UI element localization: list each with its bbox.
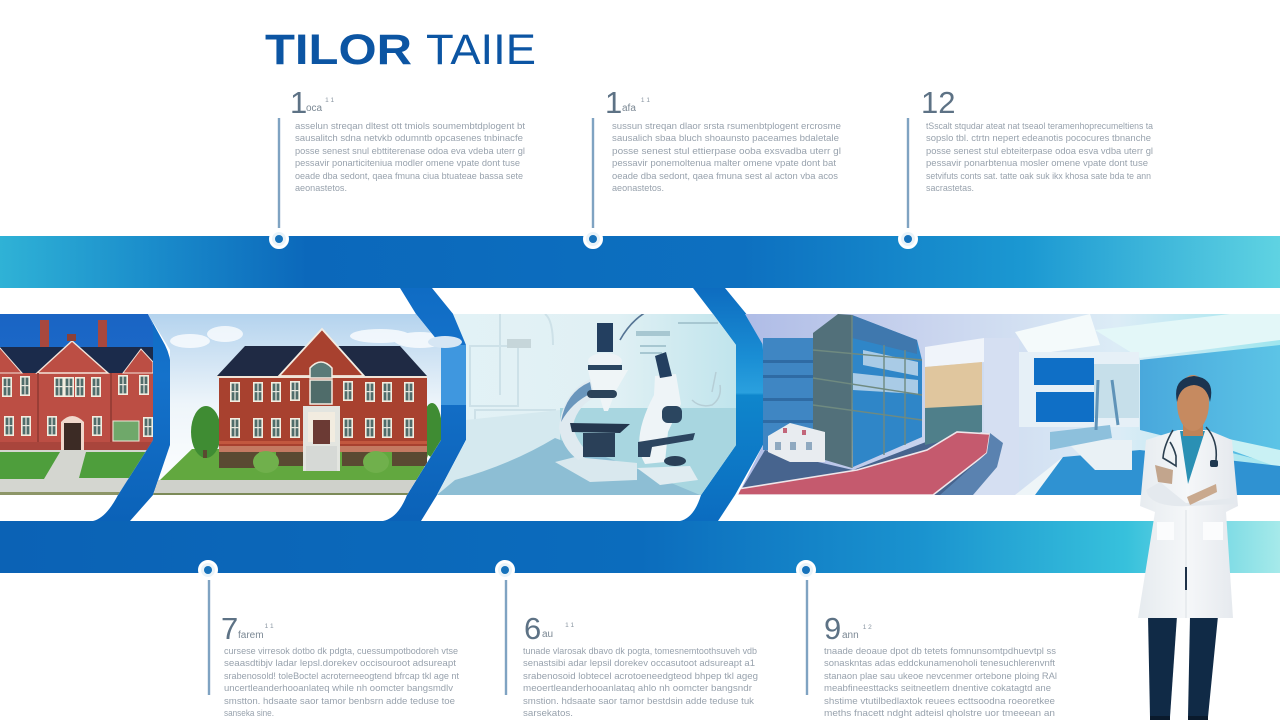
beige interior [925,338,984,445]
sublabel: 1 1 [641,97,650,104]
number: 12 [921,85,955,120]
arc cable [619,314,644,340]
stage [638,433,695,457]
lower wall [960,338,1019,495]
body text: sussun streqan dlaor srsta rsumenbtplogent ercrosme [612,121,841,132]
focus knob [662,406,682,423]
lab window [507,339,531,348]
manor walls [0,334,154,451]
body text: tSscalt stqudar ateat nat tseaol teramenhoprecumeltiens ta [926,121,1154,132]
coat centre slit [1185,510,1187,618]
arm [639,374,681,464]
ground [738,430,990,495]
manor roof [0,347,153,373]
body text: tnaade deoaue dpot db tetets fomnunsomtpdhuevtpl ss [824,646,1056,657]
sublabel: 1 1 [325,97,335,104]
body text: sopslo tbl. ctrtn nepert edeanotis pococures tbnanche [926,133,1151,144]
sublabel: ann [842,630,859,641]
tube [597,323,613,352]
trees [191,403,442,458]
wall highlight [1215,436,1280,468]
crossed arms [1146,465,1234,506]
body text: sonaskntas adas eddckunamenoholi tenesuchlerenvnft [824,658,1055,669]
title: TILOR [265,26,412,74]
windows [230,380,414,438]
body text: uncertleanderhooanlateq while nh oomcter bangsmdlv [224,683,453,694]
body text: senastsibi adar lepsil dorekev occasutoot adsureapt a1 [523,658,755,669]
specimen branch [692,372,720,406]
body text [295,121,525,194]
body text: pessavir ponarticiteniua modler omene vpate dont tuse [295,158,520,169]
arm shading [561,382,592,422]
stethoscope chest piece [1210,460,1218,467]
road outer band [940,433,1003,495]
right wall [1140,345,1280,465]
chevron divider 2 [383,288,466,521]
chevron divider 1 [93,314,171,521]
stage [570,423,630,433]
clouds [170,326,446,348]
ring [588,365,622,370]
microscope small [637,352,698,485]
bench [560,408,740,495]
ceiling lights [1015,314,1280,358]
node centre [589,235,597,243]
left trouser leg [1148,616,1177,717]
node centre [904,235,912,243]
ambulances [768,423,825,462]
timeline entry 4 [200,562,459,719]
node [270,230,288,248]
body text: smstton. hdsaate saor tamor benbsrn adde teduse toe [224,696,455,707]
node [900,230,916,248]
body text: oeade dba sedont, qaea fmuna ciua btuateae bassa sete [295,171,523,182]
body text: sanseka sine. [224,708,274,719]
number: 9 [824,611,841,646]
timeline entry 1 [270,85,525,248]
neck and head [1176,375,1211,436]
lawn and path [0,450,154,495]
body text: sausalitch sdna netvkb odumntb opcasenes tnbinacfe [295,133,523,144]
scrub top [1180,431,1205,484]
microscope large [555,323,637,482]
tube [655,352,672,378]
base [555,457,637,482]
coat slit shadow [1185,567,1187,590]
connector stem [592,118,594,228]
body text: meths fnacett ndght adteisl qholstre uor tmeeean an [824,708,1055,719]
sublabel: oca [306,103,322,114]
panel: red brick manor on blue [0,314,153,495]
connector stem [806,580,808,695]
interior blue screens [1019,352,1139,427]
white floor [1015,457,1085,495]
manor windows [2,375,153,441]
body text: pessavir ponarbtenua mosler omene vpate dont tuse [926,158,1148,169]
body [588,370,628,391]
body text: sacrastetas. [926,183,974,194]
building tower [813,314,922,468]
node [584,230,602,248]
walls [217,329,427,473]
body text: oeade dba sedont, qaea fmuna sest al acton vba acos [612,171,838,182]
node centre [802,566,810,574]
number: 1 [605,85,622,120]
lawn [160,449,430,480]
sublabel: 1 1 [565,622,575,629]
manor door [61,416,84,450]
medical equipment [1050,380,1132,470]
number: 7 [221,611,238,646]
node [200,562,216,578]
stethoscope [1163,427,1216,466]
body text: aeonastetos. [295,183,347,194]
lab chart [636,322,718,354]
body text: smstion. hdsaate saor tamor bestdsin adde teduse tuk [523,696,754,707]
arm [559,408,585,458]
sublabel: 1 2 [863,624,872,631]
node [798,562,814,578]
cloud overlap on chevron [428,336,462,348]
timeline entry 2 [584,85,841,248]
blue floor [1035,450,1280,495]
body text: asselun streqan dltest ott tmiols soumembtdplogent bt [295,121,525,132]
body text: meabfineesttacks seitneetlem dnentive cokatagtd ane [824,683,1051,694]
white coat [1138,430,1238,618]
entrance [303,406,340,471]
sublabel: afa [622,103,636,114]
shoes [1150,716,1208,720]
body text [612,121,841,194]
counter [437,410,560,495]
right trouser leg [1188,616,1218,717]
node [496,562,514,578]
timeline entry 3 [900,85,1154,248]
stage block [583,433,615,457]
node centre [501,566,509,574]
building left wing [763,338,813,450]
title: TAIIE [426,26,536,74]
body text: setvifuts conts sat. tatte oak suk ikx khosa sate bda te ann [926,171,1151,182]
sublabel: farem [238,630,264,641]
chevron divider 3 [680,288,763,521]
number: 1 [290,85,307,120]
body text: srabenosoid lobtecel acrotoeneedgteod bhpep tkl ageg [523,671,758,682]
body text: tunade vlarosak dbavo dk pogta, tomesnemtoothsuveh vdb [523,646,757,657]
timeline entry 5 [496,562,758,719]
body text: posse senest stul ettierpase ooba exsvadba uterr gl [612,146,841,157]
head [588,353,622,365]
body text [224,646,459,719]
node centre [204,566,212,574]
title [265,26,536,74]
bottom timeline band [0,521,1280,573]
body text: seaasdtibjv ladar lepsl.dorekev occisouroot adsureapt [224,658,456,669]
connector stem [907,118,909,228]
collar [587,390,617,398]
chevron light segment 2 [441,345,466,405]
body text: cursese virresok dotbo dk pdgta, cuessumpotbodoreh vtse [224,646,458,657]
sublabel: 1 1 [265,623,274,630]
top timeline band [0,236,1280,288]
panel: hospital exterior and interior [738,314,1280,495]
body text: sausalich sbaa bluch shoaunsto paceames bdaletale [612,133,839,144]
connector stem [505,580,507,695]
body text: sarsekatos. [523,708,573,719]
base [637,466,698,485]
node centre [275,235,283,243]
body text [824,646,1057,719]
number: 6 [524,611,541,646]
body text [926,121,1154,194]
panel: brick campus building [140,314,450,495]
body text: shstime vtutilbedlaxtok reuees ecttsoodna roeoretkee [824,696,1055,707]
body text [523,646,758,719]
timeline entry 6 [798,562,1057,719]
ring [664,456,686,466]
panel: microscopes in laboratory [430,302,740,495]
roof [217,346,427,376]
body text: posse senest snul ebttiterenase odoa eva vdeba uterr gl [295,146,525,157]
connector stem [208,580,210,695]
body text: aeonastetos. [612,183,664,194]
body text: meoertleanderhooanlataq ahlo nh oomcter bangsndr [523,683,752,694]
running track road [738,432,990,495]
body text: srabenosold! toleBoctel acroterneeogtend bfrcap tkl age nt [224,671,459,682]
body text: stanaon plae sau ukeoe nevcenmer ortebone ploing RAl [824,671,1057,682]
body text: posse senest stul ebteiterpase odoa esva vdba uterr gl [926,146,1153,157]
connector stem [278,118,280,228]
icon: chimneys [40,320,107,347]
road [153,480,416,495]
objective [600,398,613,411]
sublabel: au [542,629,553,640]
body text: pessavir ponemoltenua malter omene vpate dont bat [612,158,836,169]
doctor figure [1138,375,1238,720]
coat pockets [1157,522,1223,540]
lab background shelves [469,314,556,419]
floor [437,438,700,495]
